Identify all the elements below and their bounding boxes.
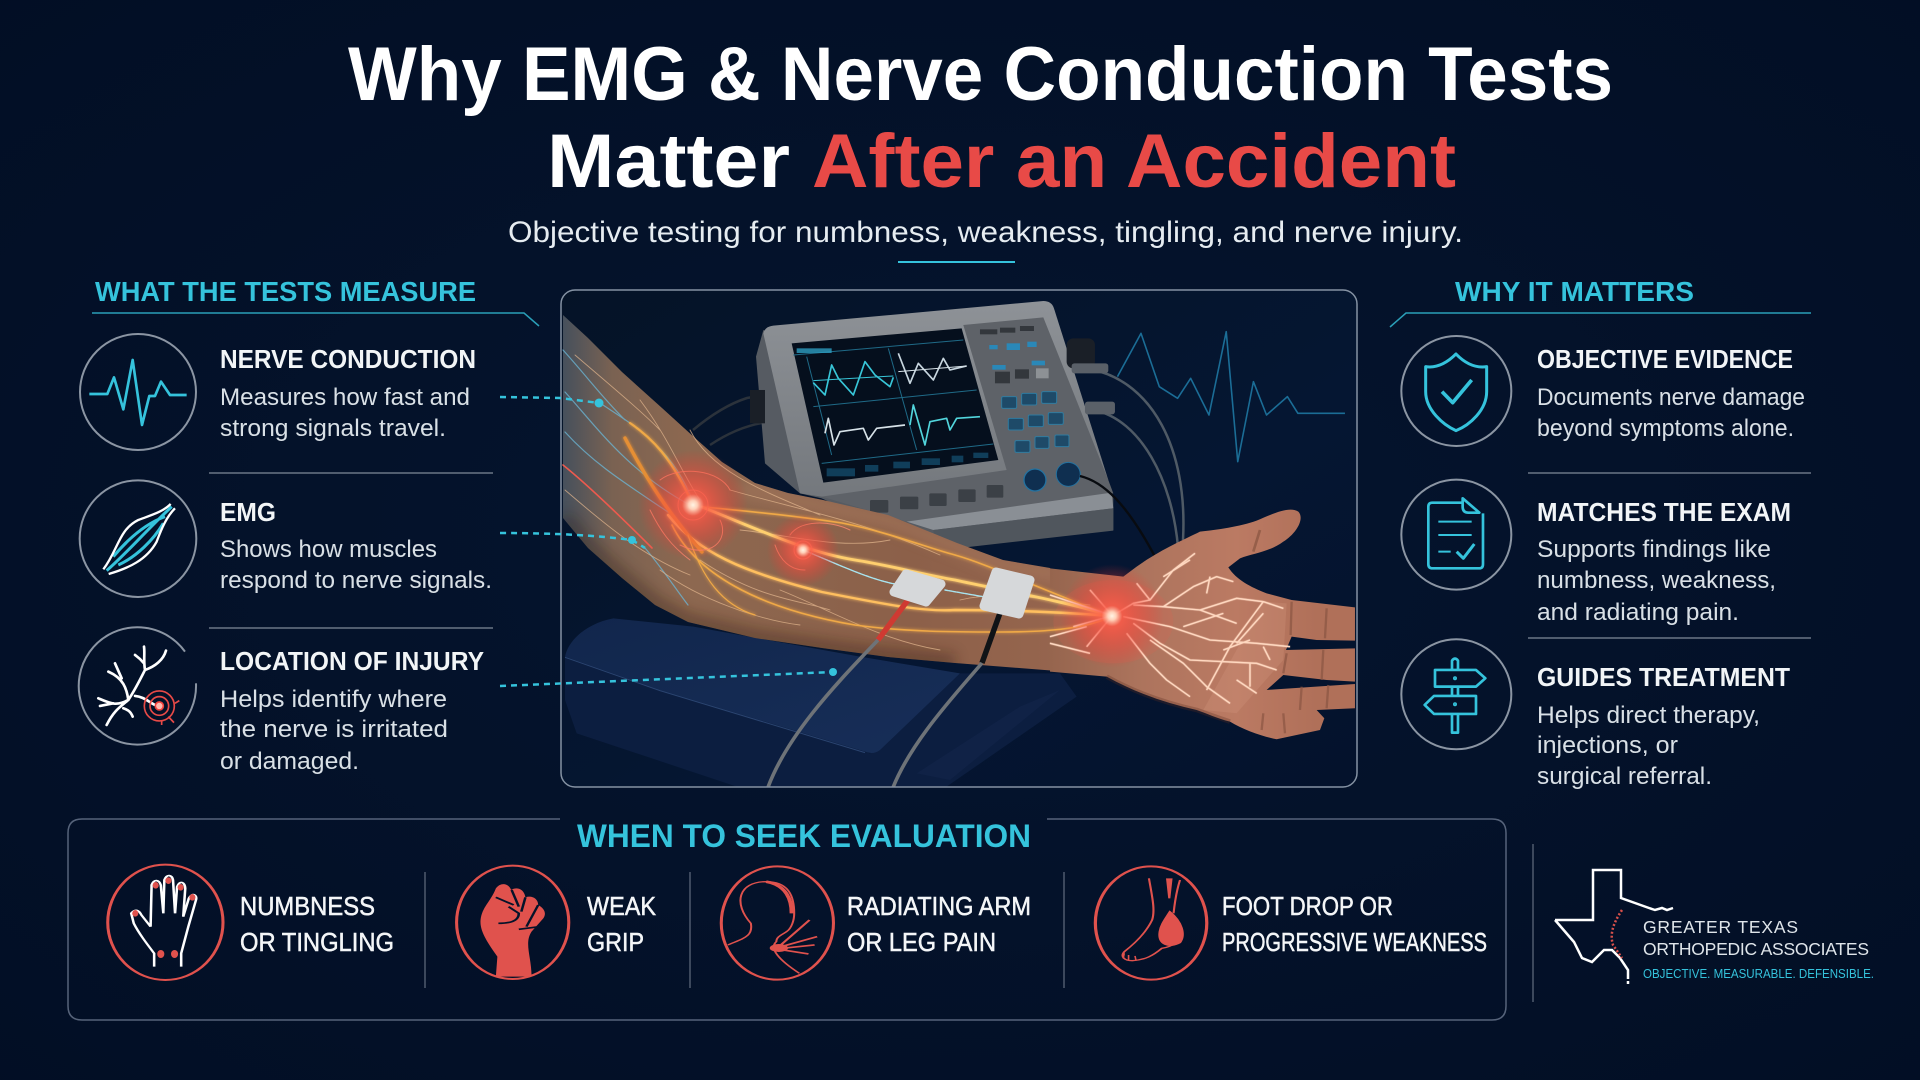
location of injury text: or damaged. <box>220 748 359 775</box>
title: Why EMG & Nerve Conduction Tests <box>348 32 1613 117</box>
emg text: respond to nerve signals. <box>220 567 492 594</box>
guides treatment text: Helps direct therapy, <box>1537 702 1760 729</box>
heading: why it matters: WHY IT MATTERS <box>1455 276 1694 307</box>
guides treatment text: injections, or <box>1537 732 1678 759</box>
logo: greater texas orthopedic associates: ORTHOPEDIC ASSOCIATES <box>1643 939 1869 959</box>
ecg ghost trace <box>1117 332 1345 462</box>
numbness label: OR TINGLING <box>240 927 394 957</box>
guides treatment text: surgical referral. <box>1537 763 1712 790</box>
nerve conduction text <box>220 344 476 442</box>
objective evidence text: Documents nerve damage <box>1537 384 1805 411</box>
nerve conduction text: Measures how fast and <box>220 384 470 411</box>
title <box>348 32 1613 204</box>
icon: document check <box>1401 480 1511 590</box>
electrodes and leads <box>767 572 1030 790</box>
icon: radiating pain <box>721 866 833 980</box>
hand <box>1050 510 1355 739</box>
radiating pain label: OR LEG PAIN <box>847 927 996 957</box>
nerve conduction text: NERVE CONDUCTION <box>220 344 476 374</box>
matches the exam text: and radiating pain. <box>1537 599 1739 626</box>
matches the exam text: numbness, weakness, <box>1537 567 1776 594</box>
subtitle: Objective testing for numbness, weakness, tingling, and nerve injury. <box>508 216 1463 249</box>
icon: signpost <box>1401 639 1511 749</box>
icon: foot drop <box>1095 866 1207 980</box>
leader: injury callout <box>500 668 837 686</box>
cables behind <box>693 370 1183 547</box>
objective evidence text <box>1537 344 1805 442</box>
matches the exam text: Supports findings like <box>1537 536 1771 563</box>
emg text: EMG <box>220 497 276 527</box>
numbness label: NUMBNESS <box>240 891 375 921</box>
hot spots <box>638 450 1164 668</box>
logo: greater texas orthopedic associates: GREATER TEXAS <box>1643 917 1798 937</box>
matches the exam text: MATCHES THE EXAM <box>1537 497 1791 527</box>
nerve rings around hot spots <box>650 471 850 570</box>
nerves <box>563 350 1112 650</box>
icon: nerve injury location <box>79 627 196 745</box>
logo mark: texas outline <box>1555 870 1673 986</box>
emg text: Shows how muscles <box>220 536 437 563</box>
location of injury text <box>220 646 484 775</box>
weak grip label <box>587 891 657 957</box>
weak grip label: GRIP <box>587 927 644 957</box>
icon: muscle <box>80 480 196 597</box>
location of injury text: the nerve is irritated <box>220 716 448 743</box>
foot drop label: FOOT DROP OR <box>1222 891 1393 921</box>
objective evidence text: OBJECTIVE EVIDENCE <box>1537 344 1793 374</box>
leader: nerve conduction callout <box>500 397 604 408</box>
icon: fist <box>457 866 569 979</box>
arm <box>563 315 1070 672</box>
arm rest cushion <box>565 618 1077 790</box>
location of injury text: Helps identify where <box>220 686 447 713</box>
icon: nerve pulse <box>80 334 196 450</box>
monitor <box>750 301 1155 557</box>
objective evidence text: beyond symptoms alone. <box>1537 415 1794 442</box>
logo: greater texas orthopedic associates <box>1555 870 1874 986</box>
numbness label <box>240 891 394 957</box>
radiating pain label <box>847 891 1031 957</box>
leader: emg callout <box>500 533 645 548</box>
matches the exam text <box>1537 497 1791 626</box>
central illustration panel <box>561 290 1357 790</box>
foot drop label: PROGRESSIVE WEAKNESS <box>1222 927 1487 957</box>
emg text <box>220 497 492 594</box>
heading: when to seek evaluation: WHEN TO SEEK EVALUATION <box>577 818 1031 854</box>
heading: what the tests measure: WHAT THE TESTS MEASURE <box>95 276 476 307</box>
guides treatment text: GUIDES TREATMENT <box>1537 662 1790 692</box>
hand nerve network <box>1050 553 1290 703</box>
foot drop label <box>1222 891 1487 957</box>
panel: why it matters <box>1390 276 1811 790</box>
title: After an Accident <box>812 119 1456 204</box>
icon: shield <box>1401 336 1511 446</box>
icon: numb hand <box>108 865 223 980</box>
guides treatment text <box>1537 662 1790 790</box>
radiating pain label: RADIATING ARM <box>847 891 1031 921</box>
panel: what the tests measure <box>79 276 539 775</box>
weak grip label: WEAK <box>587 891 657 921</box>
title: Matter <box>547 119 790 204</box>
location of injury text: LOCATION OF INJURY <box>220 646 484 676</box>
logo: greater texas orthopedic associates: OBJECTIVE. MEASURABLE. DEFENSIBLE. <box>1643 967 1874 981</box>
panel: when to seek evaluation <box>68 818 1506 1020</box>
nerve conduction text: strong signals travel. <box>220 415 446 442</box>
